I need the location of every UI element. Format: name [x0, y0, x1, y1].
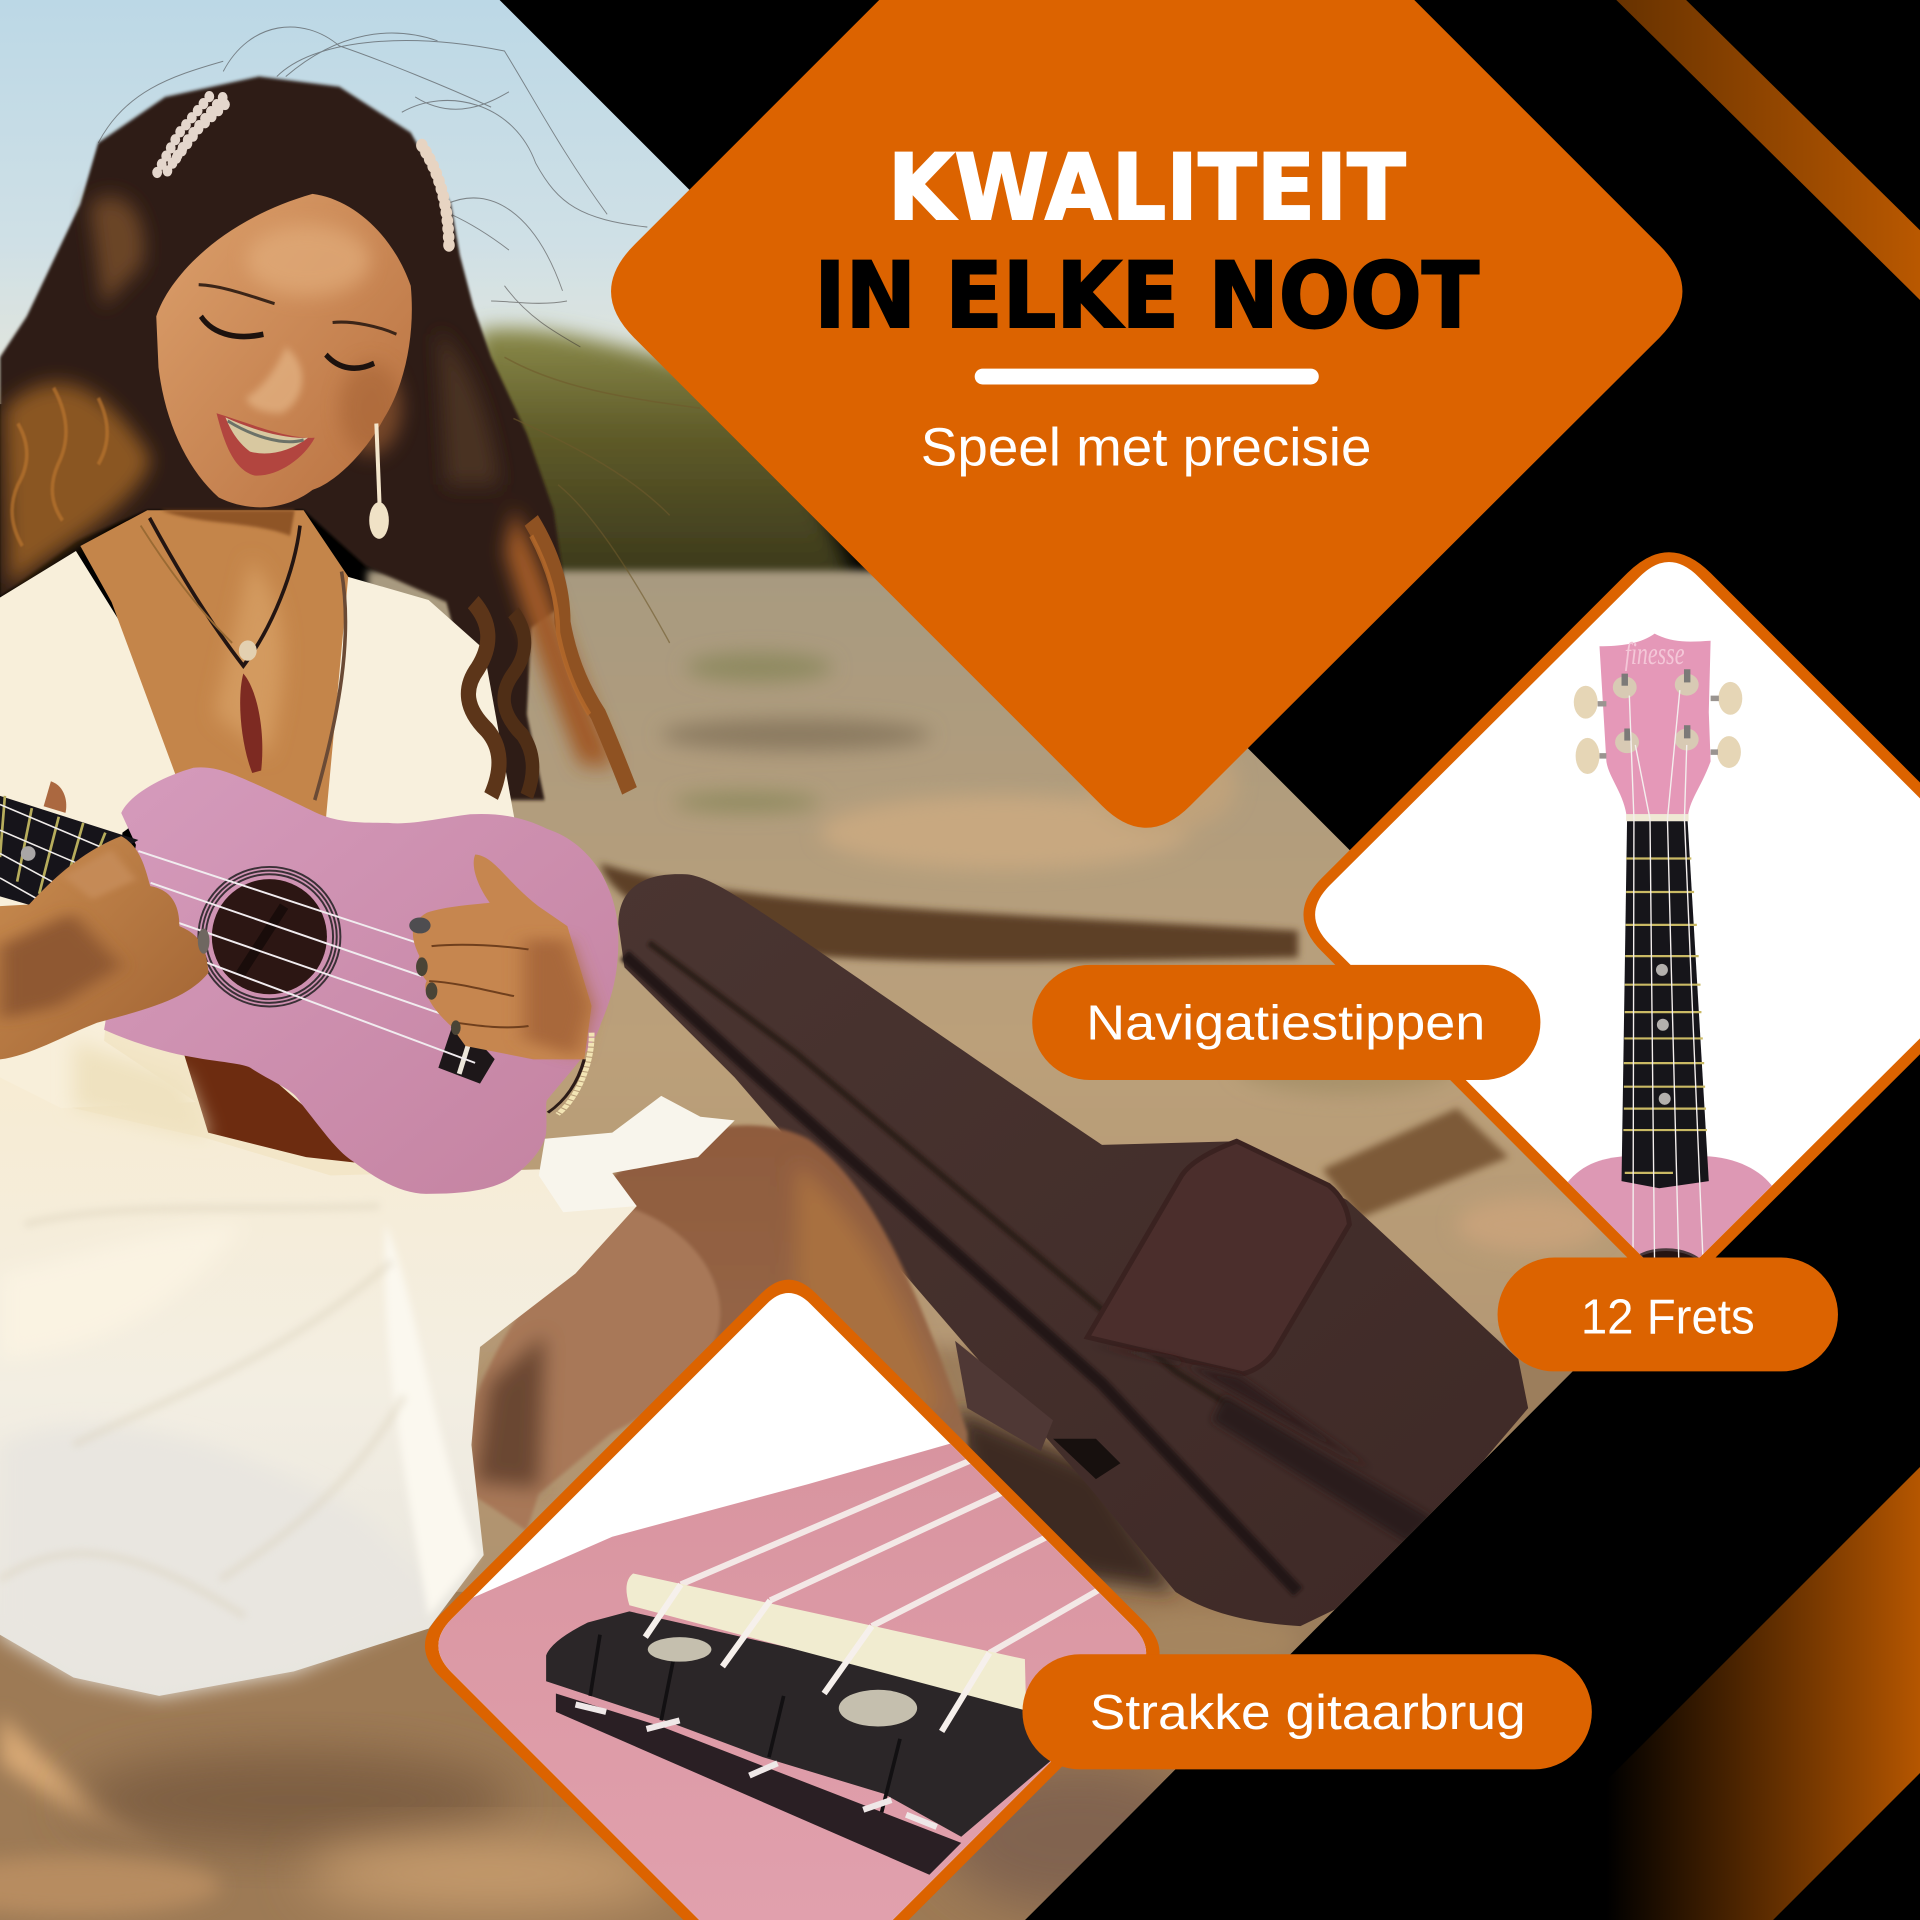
diamond white fill: [1315, 562, 1920, 1271]
bag clip: [1053, 1439, 1120, 1479]
picking hand: [409, 854, 592, 1114]
label pill: Navigatiestippen: Navigatiestippen: [1086, 997, 1485, 1051]
label pill: 12 Frets: [1498, 1258, 1838, 1371]
eyebrows: [199, 285, 275, 304]
chest and neck skin: [80, 510, 348, 867]
upper strings: [681, 1453, 1108, 1653]
finger gaps: [429, 945, 529, 1027]
strings over nut: [645, 1584, 989, 1731]
tuning posts: [1622, 669, 1690, 741]
diamond border: [1303, 552, 1920, 1283]
dress folds: [0, 1206, 404, 1616]
bracelet: [558, 1033, 592, 1114]
bag zipper seam: [624, 955, 1298, 1592]
headstock: [1599, 634, 1711, 819]
face: [156, 96, 449, 539]
bridge close-up photo: [392, 1439, 1176, 1920]
inset diamond: ukulele neck: [1303, 552, 1920, 1288]
dress ruffle: [539, 1096, 735, 1212]
distant trees: [465, 328, 857, 600]
teeth with braces: [225, 417, 308, 454]
bridge dots: [648, 1637, 711, 1662]
thumb nail: [198, 928, 209, 954]
cheek shadow: [339, 362, 402, 454]
title line 1: KWALITEIT: [888, 136, 1406, 241]
pink ukulele top: [392, 1439, 1176, 1920]
necklace pendant: [240, 674, 262, 773]
fretting hand: [0, 781, 209, 1059]
carrying bag: [618, 874, 1528, 1626]
ukulele sound hole: [198, 867, 340, 1007]
mouth: [217, 413, 315, 476]
dress neckline strap: [315, 571, 346, 800]
diamond white fill: [438, 1293, 1146, 1920]
fret dots: [1656, 964, 1668, 976]
hair back and strands: [0, 27, 700, 800]
pearl hair clip left: [157, 96, 228, 172]
eyes: [201, 316, 263, 336]
legs: [472, 1123, 970, 1530]
string ends: [576, 1704, 937, 1827]
nut: [626, 1573, 1026, 1711]
tuning buttons: [1574, 682, 1742, 774]
subtitle: Speel met precisie: [921, 417, 1371, 477]
label pill: Navigatiestippen: [1032, 965, 1540, 1080]
label pill: Strakke gitaarbrug: Strakke gitaarbrug: [1090, 1686, 1526, 1740]
flyaway hair: [98, 27, 647, 347]
headstock logo: finesse: [1625, 637, 1684, 671]
bag front pocket: [1087, 1141, 1349, 1374]
bridge blocks: [546, 1611, 1051, 1837]
nails: [409, 917, 431, 933]
diamond border: [425, 1280, 1160, 1920]
title underline: [975, 369, 1319, 384]
shadow under bag: [955, 1408, 1176, 1592]
green-lit flyaway strands: [504, 357, 700, 643]
orange title diamond: [611, 0, 1682, 828]
sand background: [362, 565, 1628, 1920]
driftwood logs: [600, 863, 1509, 1218]
hair highlights: [4, 196, 616, 765]
ukulele body top: [1560, 1156, 1776, 1288]
ukulele body: [104, 767, 618, 1194]
frets: [1623, 859, 1707, 1173]
necklace: [150, 518, 300, 666]
ukulele neck photo: [1560, 634, 1776, 1288]
ukulele bridge: [438, 1016, 495, 1084]
pearl hair clip right: [422, 145, 449, 253]
tuning shafts: [1598, 698, 1719, 756]
sand near bag: [936, 1342, 1572, 1920]
earring: [376, 424, 379, 503]
tuning washers: [1613, 674, 1699, 753]
block separators: [590, 1635, 900, 1812]
title line 2: IN ELKE NOOT: [814, 244, 1479, 349]
label pill: 12 Frets: 12 Frets: [1581, 1290, 1755, 1344]
ukulele: [0, 767, 618, 1194]
bridge base: [556, 1693, 961, 1875]
sound hole rings: [1627, 1250, 1705, 1288]
inset diamond: bridge close-up: [392, 1280, 1176, 1920]
ukulele strings: [138, 851, 475, 1063]
sand texture patches: [661, 653, 1604, 1251]
sky: [0, 0, 690, 404]
dress underlay behind ukulele: [0, 1030, 372, 1176]
left curl strands: [12, 388, 107, 546]
bottom right gradient band: [1607, 1467, 1920, 1920]
white dress lower: [0, 1078, 735, 1696]
nose highlight: [246, 347, 302, 413]
foreground sand: [0, 1592, 1298, 1920]
strings: [1629, 690, 1703, 1266]
ukulele neck: [0, 796, 138, 905]
label pill: Strakke gitaarbrug: [1022, 1654, 1592, 1769]
curls over dress: [468, 520, 629, 796]
top right gradient stripe: [1616, 0, 1920, 300]
nut: [1626, 814, 1689, 821]
ukulele back shadow: [184, 1053, 361, 1163]
dress upper: [0, 551, 517, 1139]
forehead shine: [246, 225, 371, 296]
fretboard: [1622, 821, 1709, 1188]
